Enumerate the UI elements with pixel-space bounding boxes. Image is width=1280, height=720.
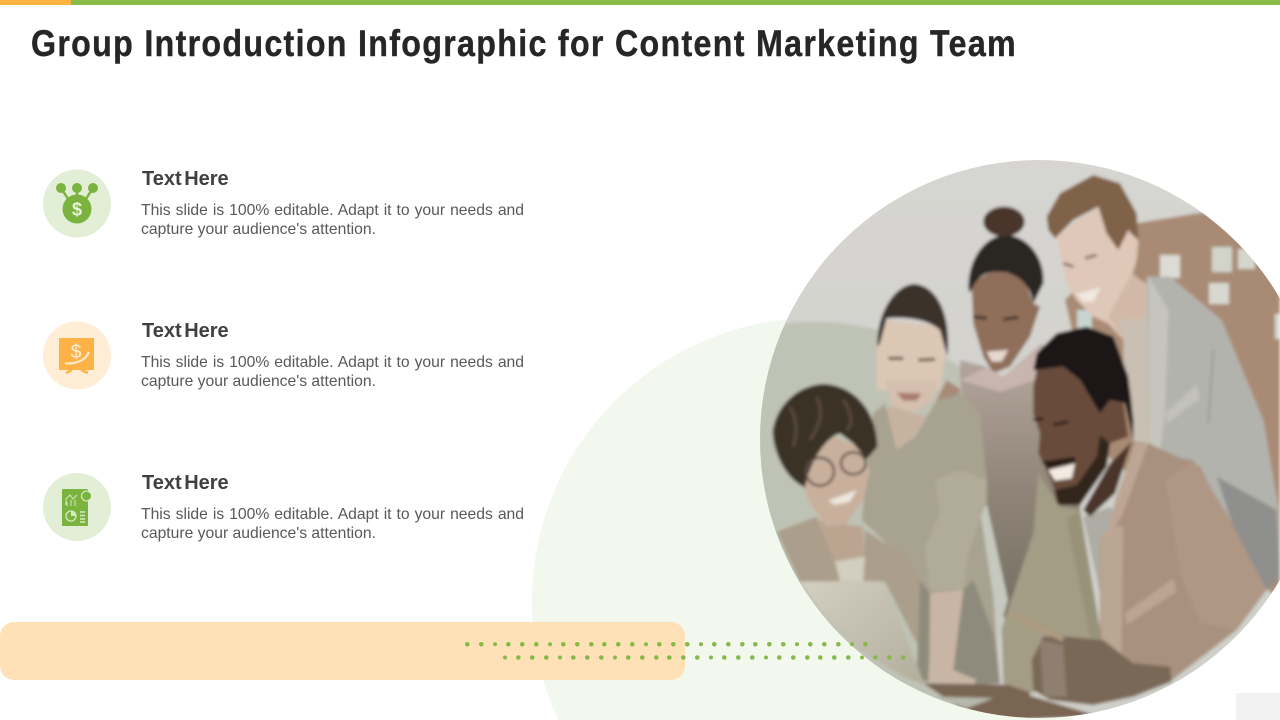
title: Group Introduction Infographic for Content Marketing Team: [31, 23, 1017, 64]
hands: [1032, 637, 1172, 705]
icon: money network: [43, 170, 111, 238]
icon: report document: [43, 473, 111, 541]
body 3: [141, 506, 524, 542]
heading 2: Text Here: [142, 320, 229, 342]
body 3: capture your audience's attention.: [141, 525, 376, 542]
top accent bar: [0, 0, 1280, 5]
back man head: [1047, 175, 1153, 390]
back man body: [1120, 277, 1280, 590]
body 3: This slide is 100% editable. Adapt it to your needs and: [141, 506, 524, 523]
body 1: [141, 202, 524, 238]
body 1: This slide is 100% editable. Adapt it to your needs and: [141, 202, 524, 219]
orange band: [0, 622, 685, 680]
olive jacket side: [1002, 473, 1102, 693]
body 2: capture your audience's attention.: [141, 373, 376, 390]
neck: [1083, 442, 1132, 517]
left and middle women lower group: [773, 380, 1030, 720]
grey corner block: [1236, 693, 1280, 720]
large pale green circle: [532, 318, 1098, 720]
backdrop tint: [760, 321, 962, 706]
icon: presentation board: $: [71, 342, 82, 363]
body 1: capture your audience's attention.: [141, 221, 376, 238]
front man: [1000, 327, 1267, 720]
body 2: [141, 354, 524, 390]
heading 1: Text Here: [142, 168, 229, 190]
icon: money network: $: [72, 200, 82, 220]
laptop and table: [923, 683, 1030, 720]
left woman jacket: [777, 517, 920, 647]
text block 2: [141, 320, 524, 390]
dotted rows: [465, 642, 906, 660]
heading 3: Text Here: [142, 472, 229, 494]
text block 3: [141, 472, 524, 542]
brown building: [1065, 212, 1280, 600]
left woman face: [803, 437, 870, 527]
body 2: This slide is 100% editable. Adapt it to your needs and: [141, 354, 524, 371]
tan jacket side: [1098, 445, 1237, 681]
text block 1: [141, 168, 524, 238]
middle woman sweater: [862, 392, 1000, 683]
icon: presentation board: [43, 322, 111, 390]
middle woman, head: [877, 284, 948, 390]
centre woman: [968, 207, 1043, 373]
team photo in circle: [750, 150, 1280, 720]
centre woman body: [960, 345, 1080, 640]
face: [1033, 367, 1128, 503]
